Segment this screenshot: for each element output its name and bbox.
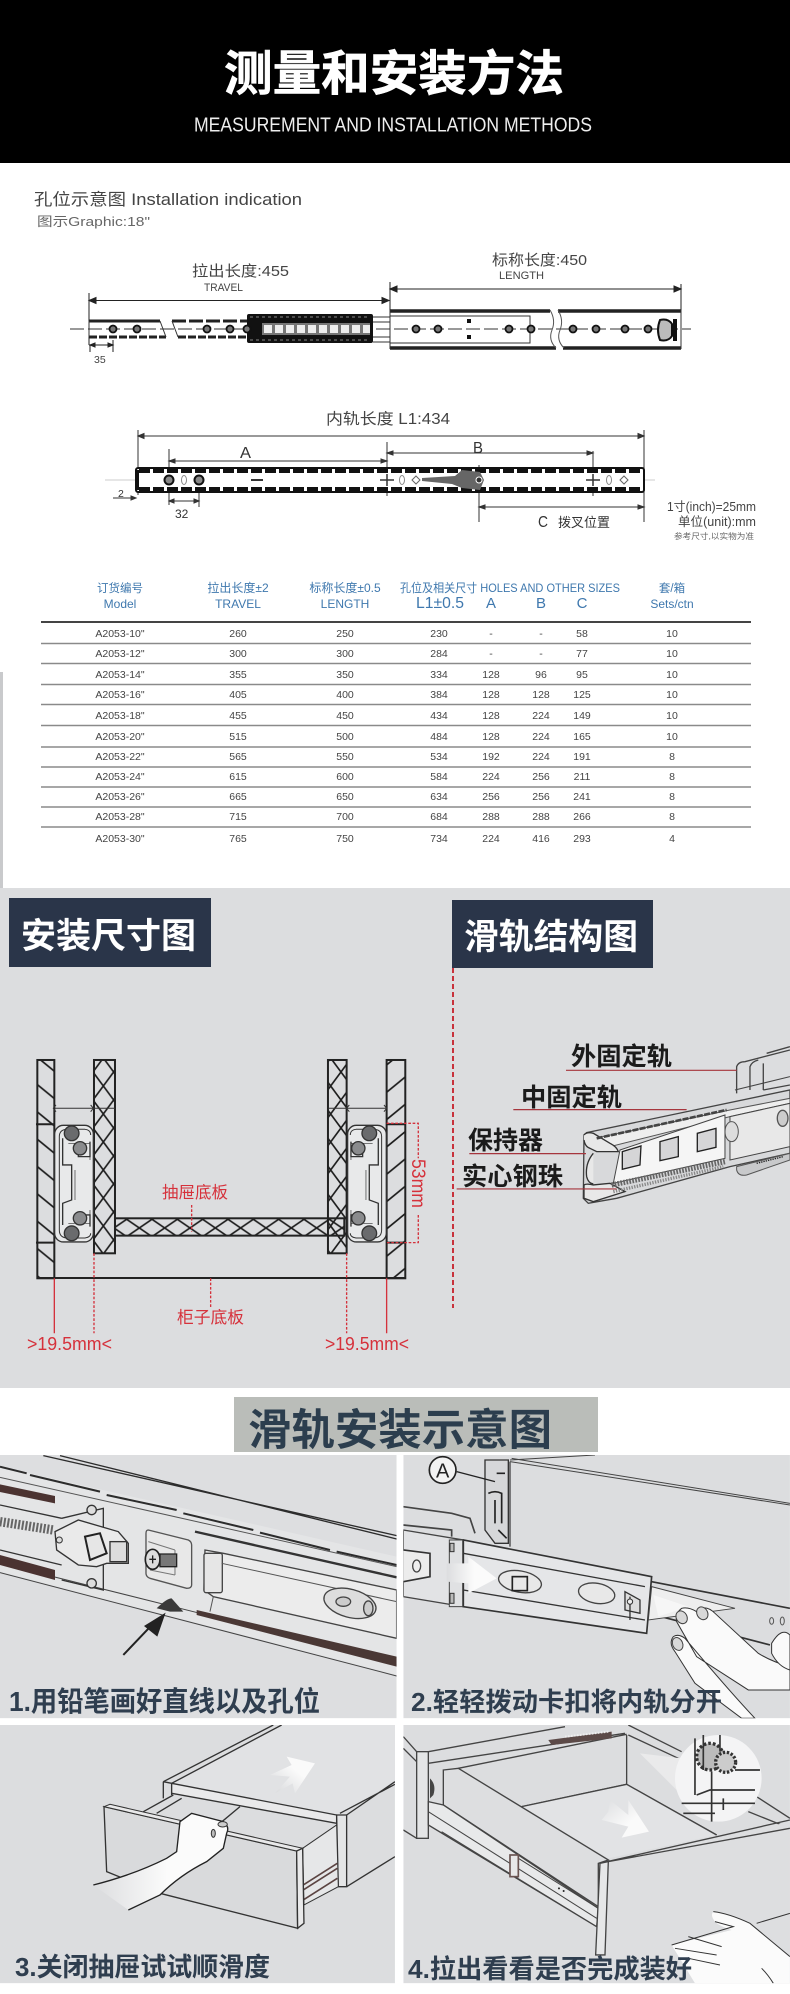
table rules bbox=[41, 622, 751, 827]
dimension arrows: inner rail bbox=[113, 430, 644, 522]
table rows: 300 bbox=[336, 648, 354, 660]
red guide lines bbox=[54, 1123, 418, 1333]
drawing: extended upper rail bbox=[70, 310, 691, 349]
table rows: - bbox=[489, 648, 493, 660]
table rows: 765 bbox=[229, 833, 247, 845]
table rows: A2053-30" bbox=[95, 833, 145, 845]
hand bbox=[112, 1814, 227, 1910]
table header bbox=[97, 580, 694, 612]
table rows: 734 bbox=[430, 833, 448, 845]
heading: rail installation diagram: 滑轨安装示意图 bbox=[248, 1407, 552, 1455]
zoom circle bbox=[640, 1735, 762, 1822]
caption: step 3: 3.关闭抽屉试试顺滑度 bbox=[15, 1952, 270, 1982]
slide rail section: left bbox=[55, 1125, 93, 1242]
dimension labels: A B C 2 32: A bbox=[240, 445, 251, 462]
heading badge: mounting size bbox=[9, 898, 211, 967]
dimension labels: A B C 2 32: 拨叉位置 bbox=[558, 515, 610, 530]
table rows: 400 bbox=[336, 689, 354, 701]
table rows: 293 bbox=[573, 833, 591, 845]
table rows: 8 bbox=[669, 811, 675, 823]
table rows: 550 bbox=[336, 751, 354, 763]
table rows: 250 bbox=[336, 628, 354, 640]
table rows: 58 bbox=[576, 628, 588, 640]
panel: mounting dimensions and rail structure bbox=[0, 888, 790, 1388]
table rows: A2053-22" bbox=[95, 751, 145, 763]
table rows: 10 bbox=[666, 628, 678, 640]
callout A bbox=[429, 1457, 495, 1483]
table header: TRAVEL bbox=[215, 597, 261, 611]
table rows: A2053-10" bbox=[95, 628, 145, 640]
panel: step 2 bbox=[403, 1455, 790, 1718]
table rows: 224 bbox=[482, 771, 500, 783]
table rows: 450 bbox=[336, 710, 354, 722]
table rows: A2053-20" bbox=[95, 731, 145, 743]
table rows: 334 bbox=[430, 669, 448, 681]
table rows: A2053-14" bbox=[95, 669, 145, 681]
labels: red dimensions: 53mm bbox=[407, 1159, 428, 1208]
rail body bbox=[583, 1090, 790, 1203]
heading: rail installation diagram bbox=[234, 1397, 598, 1455]
table rows: 224 bbox=[532, 731, 550, 743]
header band bbox=[0, 0, 790, 163]
table rows: 266 bbox=[573, 811, 591, 823]
dimension labels: A B C 2 32: 32 bbox=[175, 507, 189, 521]
table rows: - bbox=[539, 628, 543, 640]
table rows bbox=[95, 628, 678, 845]
table header: L1±0.5 bbox=[416, 595, 464, 612]
table rows: 615 bbox=[229, 771, 247, 783]
table rows: 715 bbox=[229, 811, 247, 823]
table rows: 192 bbox=[482, 751, 500, 763]
table rows: 10 bbox=[666, 710, 678, 722]
panel: installation hole indication bbox=[34, 190, 756, 541]
illustration: step 4 pulled-out drawer bbox=[403, 1725, 790, 1983]
cabinet walls and floor bbox=[36, 1060, 405, 1278]
table rows: 288 bbox=[482, 811, 500, 823]
table rows: - bbox=[489, 628, 493, 640]
table rows: 4 bbox=[669, 833, 675, 845]
labels: rail parts: 保持器 bbox=[468, 1127, 543, 1155]
caption: step 4: 4.拉出看看是否完成装好 bbox=[408, 1954, 692, 1984]
table header: 套/箱 bbox=[659, 581, 685, 595]
labels: red dimensions bbox=[27, 1159, 428, 1354]
table rows: 8 bbox=[669, 751, 675, 763]
labels: red dimensions: >19.5mm< bbox=[325, 1334, 409, 1354]
width arrows bbox=[53, 1105, 387, 1112]
heading: inner rail length: 内轨长度 L1:434 bbox=[326, 410, 450, 428]
table rows: A2053-24" bbox=[95, 771, 145, 783]
table header: 标称长度±0.5 bbox=[309, 580, 381, 595]
table rows: 405 bbox=[229, 689, 247, 701]
outer rail top segment bbox=[735, 1047, 790, 1093]
rail bracket bbox=[204, 1550, 397, 1638]
table header: 孔位及相关尺寸 HOLES AND OTHER SIZES bbox=[400, 580, 620, 595]
table rows: 288 bbox=[532, 811, 550, 823]
table rows: 700 bbox=[336, 811, 354, 823]
labels: rail parts: 实心钢珠 bbox=[462, 1163, 563, 1191]
table rows: 260 bbox=[229, 628, 247, 640]
white arrow bbox=[274, 1756, 315, 1791]
screw plate bbox=[146, 1530, 192, 1588]
table: model sizes bbox=[41, 580, 751, 845]
white arrows bbox=[447, 1557, 497, 1593]
table rows: 8 bbox=[669, 791, 675, 803]
table rows: 224 bbox=[482, 833, 500, 845]
table rows: 284 bbox=[430, 648, 448, 660]
cage plate bbox=[613, 1115, 725, 1183]
drawing: inner rail bbox=[105, 468, 655, 492]
end profile bbox=[584, 1133, 625, 1202]
table rows: 300 bbox=[229, 648, 247, 660]
table rows: 10 bbox=[666, 689, 678, 701]
table rows: 684 bbox=[430, 811, 448, 823]
drawing: slide rail structure bbox=[457, 1047, 790, 1203]
panel: step 4 bbox=[403, 1725, 790, 1984]
labels: rail parts: 外固定轨 bbox=[571, 1043, 672, 1071]
note: units: 单位(unit):mm bbox=[678, 514, 756, 529]
caption: step 1: 1.用铅笔画好直线以及孔位 bbox=[9, 1685, 320, 1717]
note: units: 参考尺寸,以实物为准 bbox=[674, 531, 754, 541]
table rows: 484 bbox=[430, 731, 448, 743]
table rows: A2053-26" bbox=[95, 791, 145, 803]
table rows: 224 bbox=[532, 751, 550, 763]
heading badge: rail structure: 滑轨结构图 bbox=[464, 918, 638, 957]
table rows: 96 bbox=[535, 669, 547, 681]
table header: 订货编号 bbox=[97, 581, 143, 595]
table rows: A2053-16" bbox=[95, 689, 145, 701]
dimension labels: travel and length: 拉出长度:455 bbox=[192, 263, 289, 280]
table rows: 256 bbox=[532, 771, 550, 783]
hand bbox=[672, 1912, 790, 1983]
table rows: 384 bbox=[430, 689, 448, 701]
table rows: 10 bbox=[666, 669, 678, 681]
table rows: 434 bbox=[430, 710, 448, 722]
title: 测量和安装方法 bbox=[224, 48, 564, 101]
illustration: step 1 rail detail bbox=[0, 1455, 397, 1718]
labels: rail parts: 中固定轨 bbox=[521, 1084, 622, 1112]
table rows: A2053-28" bbox=[95, 811, 145, 823]
note: units bbox=[667, 500, 756, 541]
labels: rail parts bbox=[462, 1043, 672, 1191]
table rows: 191 bbox=[573, 751, 591, 763]
illustration: step 2 separating rail bbox=[403, 1455, 790, 1718]
dimension labels: travel and length bbox=[192, 252, 587, 294]
table rows: 355 bbox=[229, 669, 247, 681]
table rows: 256 bbox=[482, 791, 500, 803]
table rows: 500 bbox=[336, 731, 354, 743]
pencil mark bbox=[157, 1598, 183, 1612]
table rows: 416 bbox=[532, 833, 550, 845]
dimension labels: A B C 2 32: 2 bbox=[118, 488, 124, 500]
table rows: A2053-12" bbox=[95, 648, 145, 660]
dimension labels: A B C 2 32: B bbox=[473, 440, 483, 457]
table rows: 534 bbox=[430, 751, 448, 763]
table rows: 8 bbox=[669, 771, 675, 783]
table rows: 165 bbox=[573, 731, 591, 743]
divider: red dashed bbox=[452, 968, 454, 1308]
dimension labels: travel and length: 标称长度:450 bbox=[492, 252, 587, 269]
table header: LENGTH bbox=[321, 597, 369, 611]
labels: red dimensions: 抽屉底板 bbox=[162, 1183, 228, 1202]
table header: 拉出长度±2 bbox=[207, 580, 269, 595]
white arrow bbox=[602, 1800, 649, 1838]
table rows: 515 bbox=[229, 731, 247, 743]
table rows: 10 bbox=[666, 648, 678, 660]
labels: red dimensions: >19.5mm< bbox=[27, 1334, 112, 1354]
table rows: 584 bbox=[430, 771, 448, 783]
table rows: 77 bbox=[576, 648, 588, 660]
subtitle: MEASUREMENT AND INSTALLATION METHODS bbox=[194, 114, 592, 136]
arrow bbox=[122, 1628, 149, 1656]
dimension labels: travel and length: TRAVEL bbox=[204, 282, 243, 294]
dimension labels: A B C 2 32 bbox=[118, 440, 610, 531]
note: units: 1寸(inch)=25mm bbox=[667, 500, 756, 514]
table rows: A2053-18" bbox=[95, 710, 145, 722]
table rows: 600 bbox=[336, 771, 354, 783]
steel balls bbox=[612, 1162, 725, 1185]
table rows: 149 bbox=[573, 710, 591, 722]
table header: A bbox=[486, 595, 496, 612]
label: 35: 35 bbox=[94, 354, 106, 366]
panel: step 3 bbox=[0, 1725, 395, 1983]
dimension arrows: upper rail bbox=[89, 282, 681, 352]
table header: Sets/ctn bbox=[650, 597, 694, 611]
table rows: 565 bbox=[229, 751, 247, 763]
table rows: 230 bbox=[430, 628, 448, 640]
table rows: 665 bbox=[229, 791, 247, 803]
dimension labels: A B C 2 32: C bbox=[538, 514, 548, 531]
heading: installation indication: 孔位示意图 Installation indication bbox=[34, 190, 302, 209]
heading badge: mounting size: 安装尺寸图 bbox=[21, 917, 196, 956]
table rows: 10 bbox=[666, 731, 678, 743]
table rows: 350 bbox=[336, 669, 354, 681]
table rows: 95 bbox=[576, 669, 588, 681]
table rows: 128 bbox=[482, 689, 500, 701]
table rows: 634 bbox=[430, 791, 448, 803]
table rows: 455 bbox=[229, 710, 247, 722]
table rows: 128 bbox=[482, 731, 500, 743]
table rows: 650 bbox=[336, 791, 354, 803]
illustration: step 3 closing the drawer bbox=[0, 1725, 395, 1983]
table rows: 128 bbox=[532, 689, 550, 701]
chart: cabinet cross-section bbox=[36, 1060, 418, 1333]
caption: step 2: 2.轻轻拨动卡扣将内轨分开 bbox=[411, 1687, 722, 1717]
panel: step 1 bbox=[0, 1455, 397, 1718]
heading badge: rail structure bbox=[452, 900, 653, 968]
table rows: 125 bbox=[573, 689, 591, 701]
leader lines bbox=[457, 1070, 737, 1189]
sub-heading: graphic size: 图示Graphic:18" bbox=[37, 214, 150, 229]
dimension labels: travel and length: LENGTH bbox=[499, 270, 544, 282]
table rows: 256 bbox=[532, 791, 550, 803]
table rows: 241 bbox=[573, 791, 591, 803]
slide rail section: right bbox=[348, 1125, 386, 1242]
table header: C bbox=[577, 595, 588, 612]
table rows: 128 bbox=[482, 710, 500, 722]
table rows: 224 bbox=[532, 710, 550, 722]
hand bbox=[671, 1608, 790, 1718]
table rows: - bbox=[539, 648, 543, 660]
table rows: 128 bbox=[482, 669, 500, 681]
table header: B bbox=[536, 595, 546, 612]
table rows: 211 bbox=[574, 771, 591, 783]
table header: Model bbox=[104, 597, 136, 611]
labels: red dimensions: 柜子底板 bbox=[177, 1308, 244, 1327]
callout A: A bbox=[436, 1460, 450, 1482]
table rows: 750 bbox=[336, 833, 354, 845]
